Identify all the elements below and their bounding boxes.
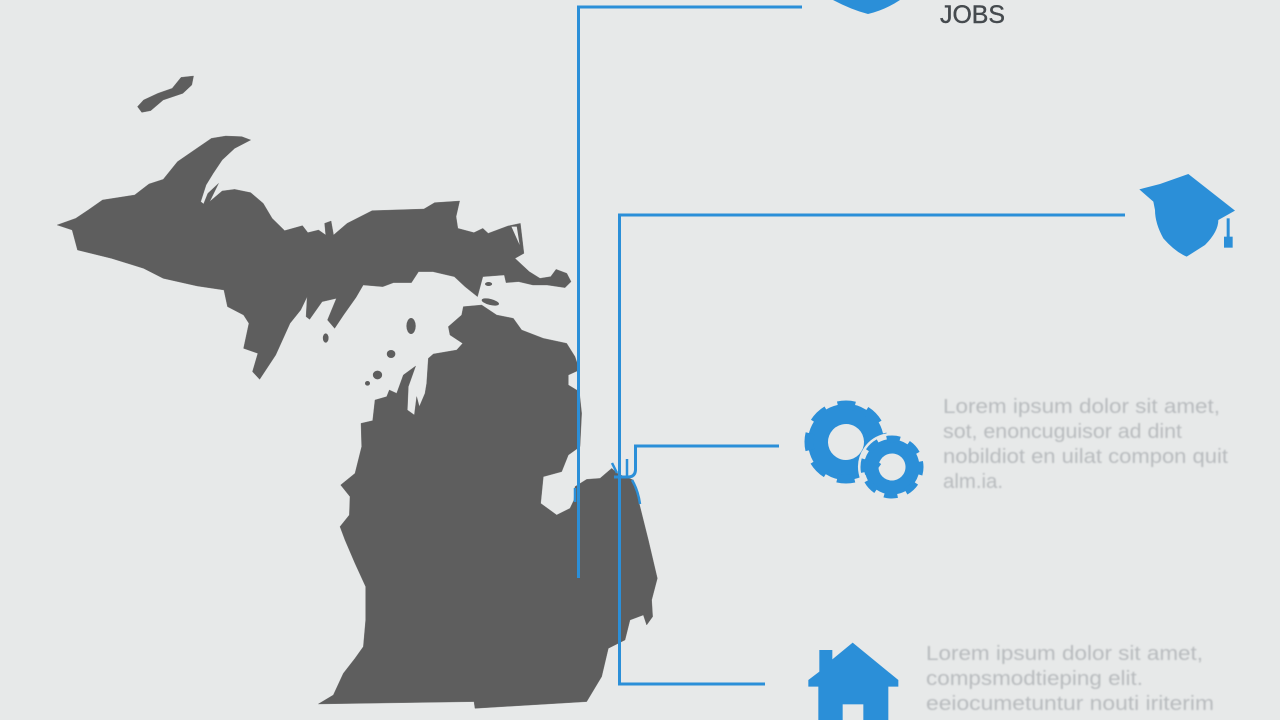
icon: house [808,643,898,720]
coast highlight strokes [575,459,640,504]
icon: gears [802,398,928,503]
small gear [856,431,928,503]
text block: industry: alm.ia. [943,471,1003,493]
text block: housing [926,643,1214,715]
text block: housing: compsmodtieping elit. [926,668,1143,690]
map of Michigan [57,76,657,708]
Lower Peninsula [318,305,657,708]
connector to education [620,215,1125,684]
text block: housing: Lorem ipsum dolor sit amet, [926,643,1203,665]
text block: industry [943,396,1228,493]
Isle Royale [137,76,194,112]
connector to jobs [578,7,802,578]
heading: jobs: JOBS [940,1,1005,29]
connector lines [575,7,1125,684]
connector to industry [614,446,779,477]
icon: graduation cap [1139,174,1235,257]
large gear [802,398,890,486]
text block: industry: Lorem ipsum dolor sit amet, [943,396,1220,418]
Upper Peninsula [57,136,571,386]
icon: graduation cap, partly cropped [833,0,900,14]
text block: housing: eeiocumetuntur nouti iriterim [926,693,1214,715]
text block: industry: sot, enoncuguisor ad dint [943,421,1182,443]
text block: industry: nobildiot en uilat compon quit [943,446,1228,468]
